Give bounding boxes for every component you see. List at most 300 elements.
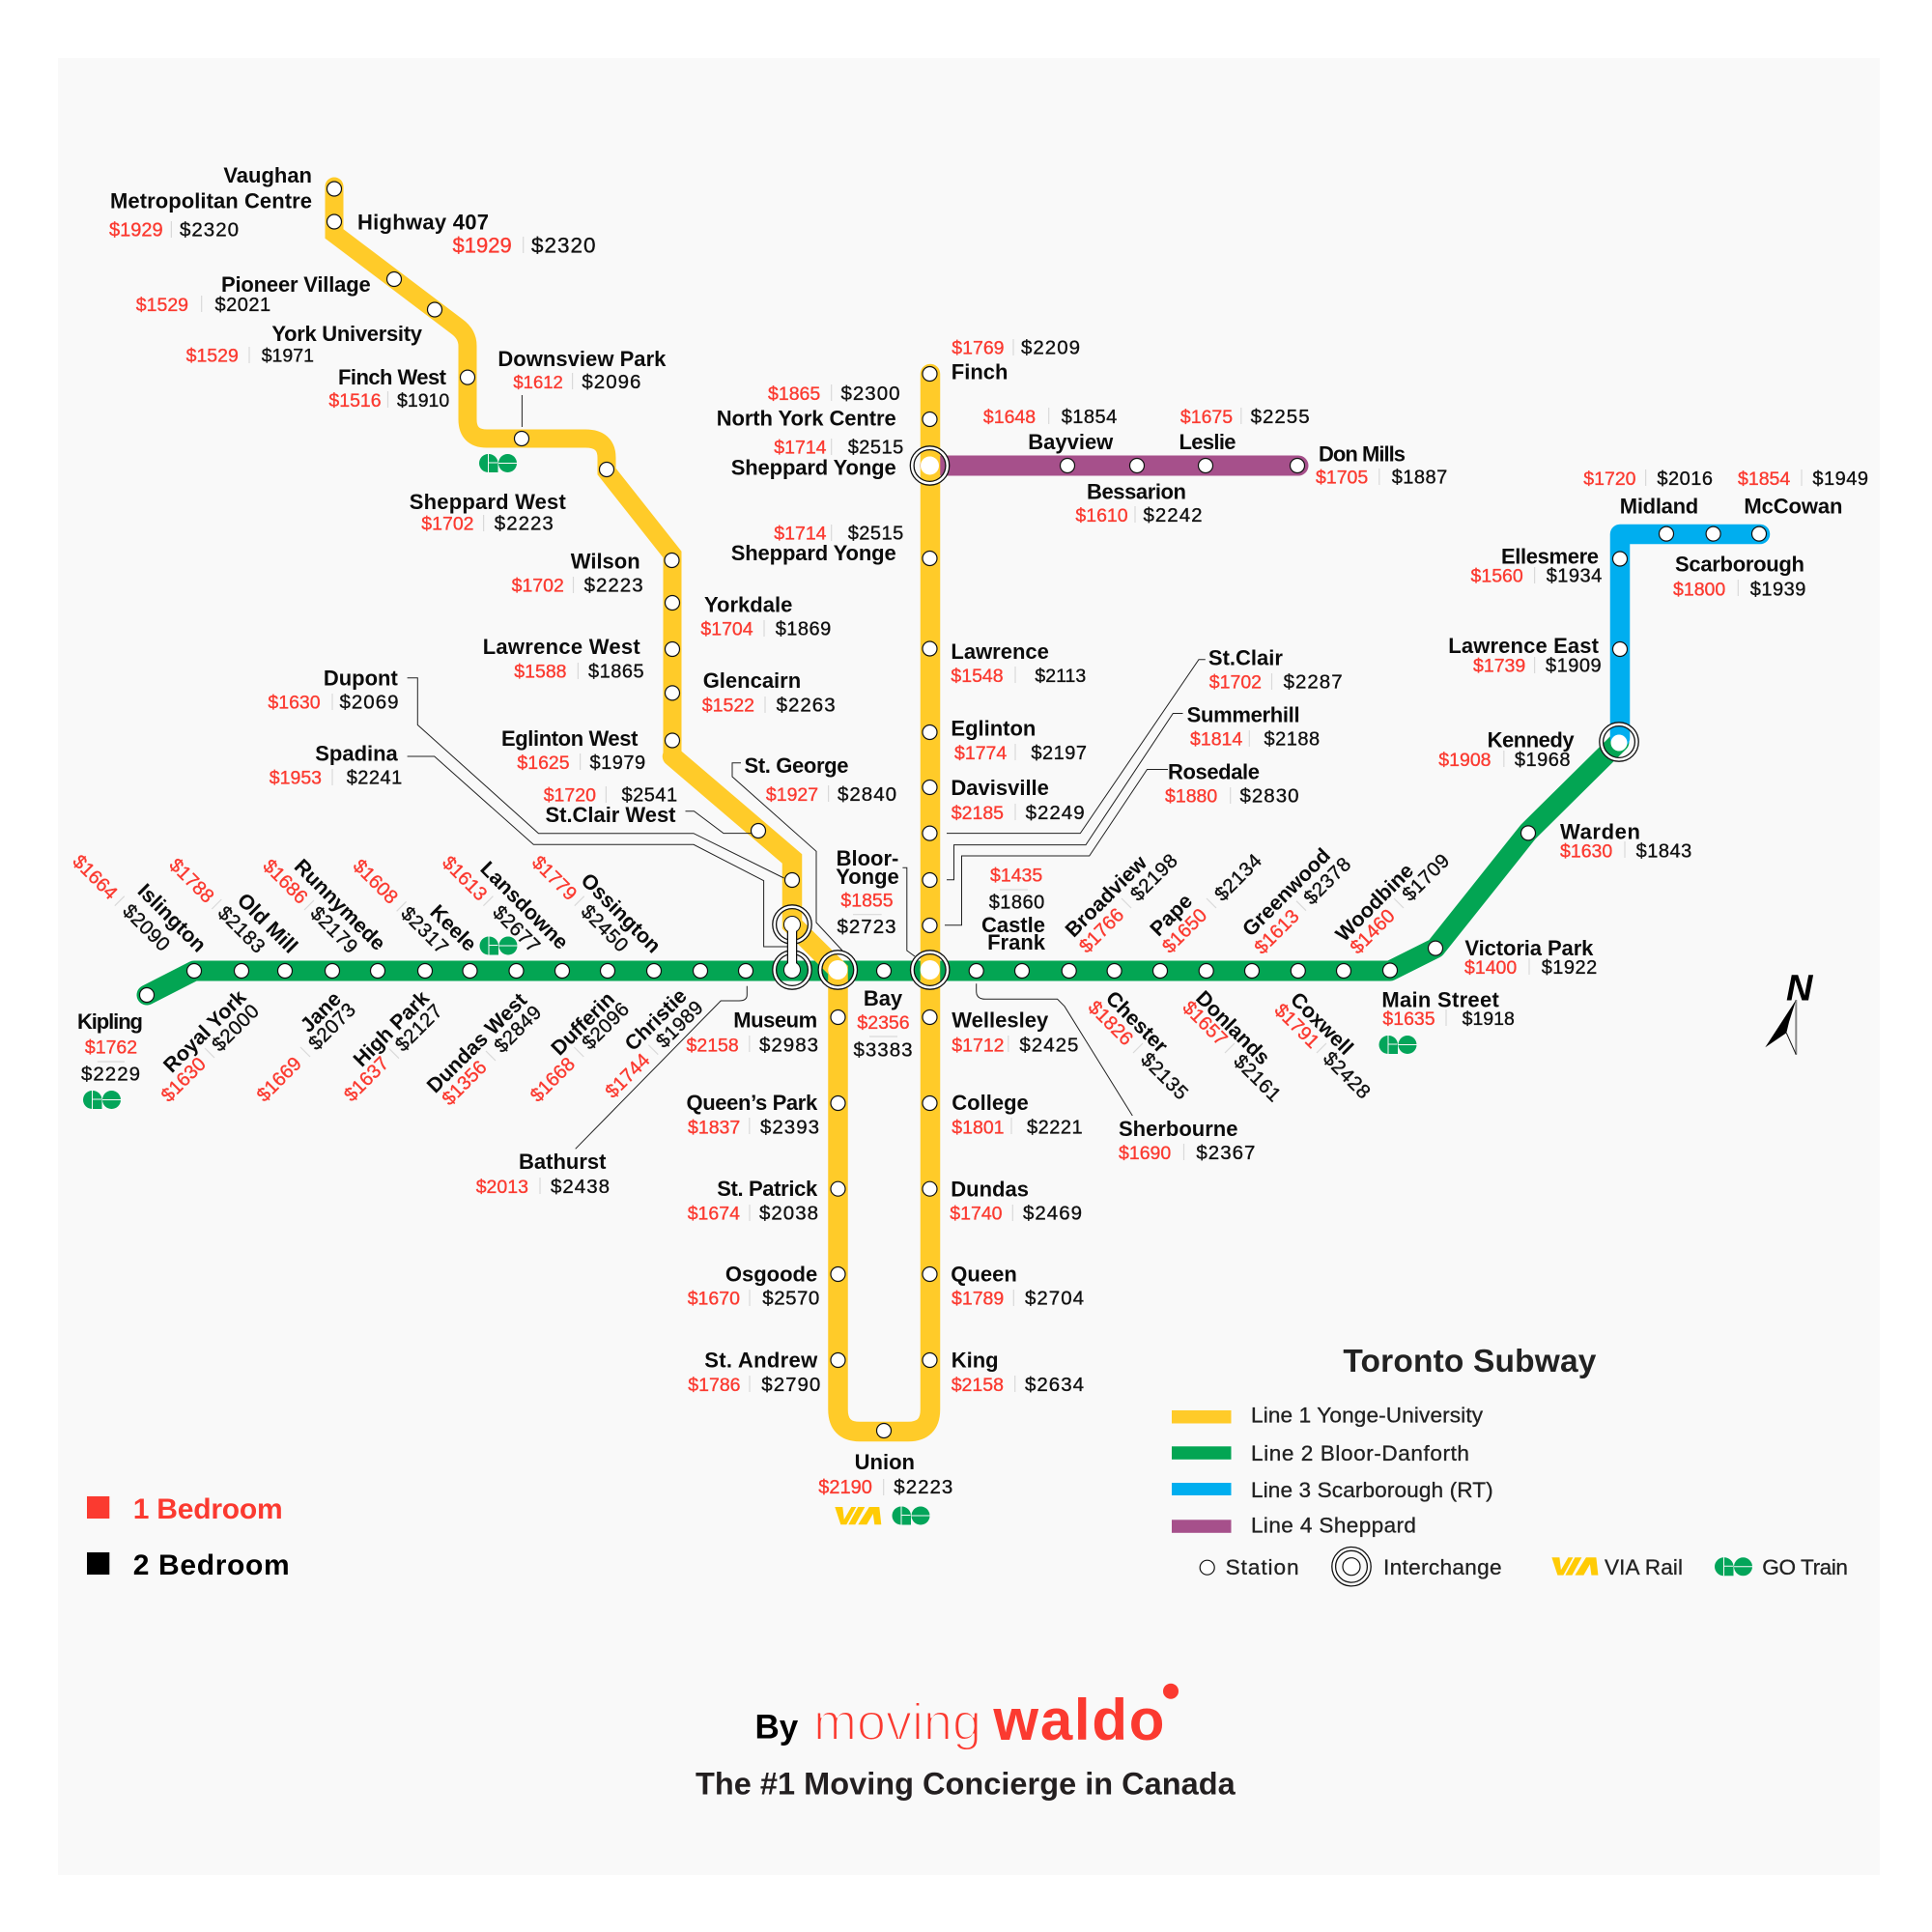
station label: Dundas West: $2849	[490, 1001, 547, 1058]
station label: Lawrence East: $1909	[1546, 655, 1602, 676]
station label: College	[952, 1091, 1083, 1138]
station label: Don Mills	[1316, 441, 1448, 488]
station label: Bay	[853, 986, 914, 1061]
station label: Downsview Park	[497, 347, 667, 393]
station label: High Park	[340, 986, 447, 1106]
stations: line 4	[1061, 458, 1304, 473]
station label: Vaughan Metropolitan Centre: Metropolitan Centre	[110, 189, 312, 213]
station label: Chester: $1826	[1084, 997, 1137, 1050]
icon: north arrow: N	[1786, 968, 1814, 1009]
station label: Osgoode	[688, 1263, 820, 1310]
station label: Midland: $2016	[1657, 469, 1714, 490]
icon: VIA Rail at Union	[835, 1507, 881, 1524]
station label: Sheppard Yonge (repeat): $1714	[774, 524, 827, 545]
bedroom key: 2 Bedroom: 2 Bedroom	[133, 1549, 290, 1581]
station label: Lawrence	[951, 639, 1086, 687]
station label: Sheppard West: Sheppard West	[410, 490, 566, 514]
station label: Don Mills: $1887	[1392, 467, 1448, 488]
station label: Dupont: $2069	[340, 692, 400, 713]
station label: Woodbine: $1460	[1347, 905, 1400, 958]
station label: Lawrence East: $1739	[1473, 655, 1525, 676]
station label: Ossington: $2450	[577, 900, 633, 957]
station label: Chester: Chester	[1101, 986, 1173, 1058]
station label: Davisville: $2249	[1026, 802, 1086, 824]
station label: Wellesley: $1712	[952, 1035, 1005, 1056]
station label: Christie: Christie	[620, 984, 692, 1055]
station label: Chester: $2135	[1136, 1048, 1193, 1105]
station label: Kipling	[77, 1009, 143, 1086]
station label: Finch West	[328, 365, 449, 412]
station label: Warden	[1560, 820, 1692, 862]
station label: Queen	[951, 1263, 1085, 1310]
station label: Bessarion	[1075, 480, 1204, 526]
icon: north arrow	[1765, 968, 1814, 1055]
station label: Keele: $2317	[396, 902, 453, 959]
station label: Old Mill: $1788	[165, 855, 218, 907]
station label: Greenwood: $2378	[1299, 853, 1356, 909]
station label: Main Street: $1918	[1463, 1009, 1515, 1030]
icon: GO train at Downsview Park	[479, 454, 517, 472]
station label: Lawrence: $1548	[951, 666, 1004, 687]
station label: Ellesmere: $1934	[1547, 566, 1603, 587]
station label: Warden: $1843	[1636, 840, 1692, 862]
station label: Union: $2223	[894, 1476, 953, 1498]
station label: Donlands: $2161	[1229, 1050, 1286, 1107]
station label: Main Street: $1635	[1382, 1009, 1435, 1030]
station label: Castle Frank: $1435	[990, 866, 1042, 887]
station label: St.Clair	[1208, 645, 1344, 694]
station label: Woodbine	[1331, 849, 1455, 958]
station label: Osgoode: $1670	[688, 1289, 740, 1310]
station label: St. Patrick: $2038	[759, 1203, 819, 1225]
station label: Warden: $1630	[1560, 840, 1612, 862]
legend: Line 4: Line 4 Sheppard	[1251, 1513, 1416, 1538]
station label: Queen's Park: Queen’s Park	[686, 1091, 818, 1115]
station label: Kipling: $1762	[85, 1037, 137, 1059]
station label: Jane	[253, 987, 360, 1106]
legend: GO Train: GO Train	[1762, 1555, 1848, 1579]
station label: Finch: Finch	[952, 359, 1008, 384]
station label: Rosedale: $1880	[1165, 785, 1217, 807]
legend: Line 2: Line 2 Bloor-Danforth	[1251, 1441, 1469, 1465]
station label: Eglinton West: Eglinton West	[501, 726, 639, 751]
station label: Dundas: $1740	[950, 1204, 1003, 1225]
station label: Lansdowne: Lansdowne	[475, 857, 573, 954]
station label: McCowan: $1854	[1738, 469, 1790, 490]
station label: Islington	[69, 851, 211, 956]
station label: Broadview: $2198	[1126, 849, 1182, 906]
station label: Ossington	[527, 852, 666, 957]
station label: St.Clair West: St.Clair West	[545, 803, 676, 827]
legend: Line 3: Line 3 Scarborough (RT)	[1251, 1478, 1493, 1502]
station label: Davisville	[951, 776, 1086, 824]
station label: Bessarion: $2242	[1144, 504, 1204, 526]
station label: Don Mills: $1705	[1316, 467, 1368, 488]
station label: Chester	[1084, 986, 1193, 1105]
station label: Leslie: Leslie	[1179, 430, 1236, 454]
station label: York University	[186, 322, 423, 367]
station label: Eglinton West: $1625	[517, 753, 570, 774]
station label: Sheppard Yonge (repeat): Sheppard Yonge	[731, 541, 896, 565]
station label: Scarborough	[1673, 552, 1806, 600]
stations: line 3	[1613, 526, 1766, 657]
station label: Dufferin: $1668	[526, 1054, 580, 1106]
station label: Old Mill: Old Mill	[233, 889, 302, 958]
station label: Bathurst: $2438	[551, 1176, 611, 1198]
station label: Sheppard West: $1702	[421, 514, 474, 535]
station label: Castle Frank: $1860	[989, 893, 1045, 914]
station label: Lawrence West	[483, 635, 644, 682]
station label: St. Andrew: St. Andrew	[704, 1348, 818, 1372]
station label: Vaughan Metropolitan Centre: $1929	[109, 220, 163, 242]
station label: Downsview Park: $2096	[582, 371, 641, 393]
station label: Coxwell: $2428	[1319, 1047, 1375, 1104]
station label: Donlands: $1657	[1179, 997, 1232, 1050]
station label: Midland: $1720	[1583, 469, 1636, 490]
station label: Spadina	[270, 742, 403, 789]
tagline: The #1 Moving Concierge in Canada	[696, 1766, 1236, 1801]
station label: Bessarion: Bessarion	[1087, 480, 1186, 504]
station label: Highway 407: Highway 407	[357, 211, 489, 234]
station label: Museum: Museum	[733, 1008, 817, 1032]
station label: St. Andrew: $1786	[688, 1375, 741, 1396]
station label: Lawrence: Lawrence	[951, 639, 1049, 664]
station label: Pape: $1650	[1158, 905, 1211, 957]
station label: Downsview Park: Downsview Park	[497, 347, 667, 371]
station label: Kennedy: Kennedy	[1488, 728, 1575, 753]
station label: Islington: $2090	[118, 899, 175, 956]
station label: St.Clair West: $2541	[622, 784, 678, 806]
station label: Victoria Park	[1464, 936, 1598, 979]
legend: Interchange: Interchange	[1383, 1555, 1502, 1579]
station label: Jane: $2073	[304, 998, 360, 1055]
station label: Main Street: Main Street	[1381, 987, 1499, 1011]
station label: Highway 407	[357, 211, 597, 258]
station label: Finch: $1769	[952, 338, 1005, 359]
station label: Yorkdale	[700, 593, 832, 640]
logo: By moving waldo: By	[755, 1708, 799, 1746]
station label: Victoria Park: Victoria Park	[1464, 936, 1594, 960]
station label: Donlands	[1179, 986, 1286, 1107]
interchange: Bloor-Yonge	[910, 951, 950, 989]
station label: Ellesmere: $1560	[1470, 566, 1523, 587]
station label: Highway 407: $2320	[531, 234, 597, 258]
station label: Pioneer Village: Pioneer Village	[221, 272, 371, 297]
station label: Glencairn: $1522	[702, 696, 754, 717]
station label: York University: $1529	[186, 346, 239, 367]
station label: Spadina: $1953	[270, 768, 322, 789]
station label: Castle Frank: Castle	[981, 913, 1045, 937]
line 1 Yonge-University south and east section	[672, 374, 930, 1432]
legend: GO Train	[1715, 1555, 1848, 1579]
station label: Lawrence West: $1865	[588, 661, 644, 682]
station label: Scarborough: Scarborough	[1675, 552, 1804, 576]
station label: Eglinton West	[501, 726, 646, 774]
line 1 Yonge-University north-west section	[334, 186, 672, 756]
station label: Lansdowne	[438, 852, 573, 957]
station label: Kennedy: $1968	[1515, 750, 1571, 771]
station label: Bay: $2356	[857, 1012, 910, 1034]
station label: Wellesley: $2425	[1019, 1034, 1079, 1056]
station label: Dundas West: Dundas West	[422, 988, 531, 1097]
station label: Finch West: $1516	[328, 390, 382, 412]
icon: GO train at Keele	[479, 936, 518, 954]
station label: St. George: $1927	[766, 784, 818, 806]
station label: Pioneer Village: $2021	[214, 295, 271, 316]
station label: Vaughan Metropolitan Centre: Vaughan	[223, 163, 312, 187]
station label: North York Centre: North York Centre	[717, 406, 896, 430]
station label: Jane: $1669	[253, 1053, 306, 1106]
icon: GO train at Main Street	[1379, 1036, 1416, 1054]
icon: GO train at Union	[893, 1506, 929, 1524]
station label: Bayview: Bayview	[1028, 430, 1114, 454]
station label: York University: York University	[271, 322, 423, 346]
station label: Castle Frank: Frank	[987, 930, 1046, 954]
station label: Eglinton West: $1979	[589, 753, 646, 774]
station label: North York Centre: $1865	[768, 384, 820, 405]
station label: Queen's Park: $1837	[688, 1117, 740, 1138]
station label: Osgoode: $2570	[762, 1288, 820, 1310]
station label: Lawrence West: $1588	[514, 661, 567, 682]
interchange: Kennedy	[1600, 723, 1638, 761]
station label: Bathurst	[476, 1150, 611, 1198]
station label: Queen: $2704	[1025, 1288, 1085, 1310]
station label: Coxwell	[1270, 987, 1375, 1104]
station label: St. Patrick: St. Patrick	[717, 1177, 818, 1201]
station label: Yorkdale: $1869	[776, 619, 832, 640]
station label: King: King	[952, 1348, 999, 1372]
station label: Museum	[686, 1008, 819, 1056]
station label: Runnymede: $1686	[259, 856, 311, 908]
station label: Sheppard Yonge: $1714	[774, 438, 827, 459]
station label: Bloor-Yonge: Bloor-	[837, 846, 898, 870]
station label: Dupont: $1630	[268, 692, 321, 713]
station label: Dupont: Dupont	[324, 666, 398, 690]
station label: Ellesmere	[1470, 544, 1603, 587]
station label: Victoria Park: $1400	[1464, 957, 1517, 979]
station label: Old Mill: $2183	[213, 901, 270, 958]
station label: Scarborough: $1800	[1673, 579, 1725, 600]
station label: Rosedale: $2830	[1240, 784, 1300, 807]
legend: Interchange	[1332, 1548, 1502, 1586]
station label: College: $1801	[952, 1117, 1005, 1138]
station label: Dufferin: $2096	[578, 998, 634, 1054]
legend: title: Toronto Subway	[1343, 1344, 1597, 1379]
station label: North York Centre	[717, 383, 901, 430]
station label: Coxwell: Coxwell	[1286, 987, 1358, 1060]
station label: Bloor-Yonge: Yonge	[836, 865, 899, 889]
station label: St. Andrew	[688, 1348, 821, 1396]
station label: Sheppard Yonge (repeat)	[731, 524, 904, 565]
line 4 Sheppard	[930, 456, 1298, 475]
station label: Bayview: $1648	[983, 407, 1036, 428]
line 3 Scarborough	[1620, 534, 1760, 738]
station label: Bay: $3383	[853, 1038, 914, 1061]
station label: St. George: St. George	[744, 753, 848, 778]
station label: Summerhill: $1814	[1190, 728, 1242, 750]
station label: Islington: $1664	[69, 851, 122, 904]
station label: King: $2158	[952, 1375, 1004, 1396]
station label: St.Clair: St.Clair	[1208, 645, 1283, 670]
station label: Coxwell: $1791	[1270, 1000, 1323, 1053]
station label: Greenwood: Greenwood	[1237, 843, 1335, 941]
station label: King	[952, 1348, 1085, 1396]
station label: Christie	[602, 984, 708, 1102]
leader lines	[408, 395, 1206, 1149]
station label: Christie: $1744	[602, 1050, 654, 1102]
station label: St.Clair: $2287	[1284, 671, 1344, 694]
station label: Ellesmere: Ellesmere	[1501, 544, 1599, 568]
stations: line 2	[139, 826, 1536, 1003]
station label: Summerhill: Summerhill	[1187, 702, 1300, 726]
station label: Dundas	[950, 1177, 1083, 1225]
logo: By moving waldo: moving	[813, 1693, 981, 1751]
station label: Main Street	[1381, 987, 1515, 1030]
station label: Queen's Park	[686, 1091, 820, 1138]
station label: St.Clair: $1702	[1209, 672, 1262, 694]
station label: Museum: $2983	[759, 1034, 819, 1056]
station label: Keele: Keele	[425, 900, 481, 955]
station label: Wellesley	[952, 1008, 1079, 1056]
station label: Pioneer Village: $1529	[136, 295, 188, 316]
station label: Sheppard Yonge	[731, 438, 904, 480]
station label: Dufferin: Dufferin	[547, 987, 619, 1060]
station label: Bloor-Yonge: $1855	[840, 891, 894, 912]
station label: Pioneer Village	[136, 272, 371, 316]
station label: Wilson: $1702	[512, 576, 564, 597]
interchange: Sheppard Yonge	[910, 446, 950, 485]
station label: Midland: Midland	[1620, 495, 1698, 519]
station label: Vaughan Metropolitan Centre: $2320	[180, 219, 240, 242]
station label: Summerhill	[1187, 702, 1321, 750]
station label: Bay: Bay	[864, 986, 903, 1010]
station label: Wilson: Wilson	[571, 549, 640, 573]
station label: Summerhill: $2188	[1264, 728, 1321, 750]
bedroom key: 1 Bedroom: 1 Bedroom	[133, 1493, 283, 1525]
station label: Victoria Park: $1922	[1542, 957, 1598, 979]
station label: Dupont	[268, 666, 400, 713]
station label: Highway 407: $1929	[452, 234, 512, 258]
station label: Rosedale: Rosedale	[1168, 759, 1260, 783]
legend: Line 4	[1172, 1513, 1416, 1538]
station label: Keele: $1608	[349, 856, 402, 908]
station label: Kennedy	[1438, 728, 1575, 771]
legend: VIA Rail: VIA Rail	[1605, 1555, 1683, 1579]
station label: Kipling: Kipling	[77, 1009, 143, 1034]
station label: Dundas West: $1356	[439, 1057, 492, 1110]
station label: Bayview: $1854	[1062, 407, 1118, 428]
station label: Broadview: $1766	[1075, 904, 1128, 957]
station label: Lawrence East: Lawrence East	[1448, 634, 1600, 658]
station label: Yorkdale: Yorkdale	[704, 593, 792, 617]
station label: Sherbourne: $2367	[1196, 1142, 1256, 1164]
station label: Broadview	[1061, 849, 1182, 957]
station label: High Park: $2127	[391, 1000, 447, 1056]
station label: Royal York: $2000	[208, 1000, 264, 1056]
station label: College: College	[952, 1091, 1029, 1115]
station label: St. Patrick: $1674	[688, 1204, 740, 1225]
station label: Royal York	[157, 985, 264, 1106]
station label: Warden: Warden	[1560, 820, 1640, 844]
station label: Bessarion: $1610	[1075, 505, 1128, 526]
station label: Dufferin	[526, 987, 634, 1106]
station label: High Park: High Park	[349, 986, 434, 1071]
station label: Keele	[349, 856, 481, 959]
station label: Eglinton: $2197	[1031, 743, 1088, 764]
station label: Union	[818, 1450, 953, 1498]
station label: Kennedy: $1908	[1438, 750, 1492, 771]
station label: Royal York: Royal York	[159, 985, 251, 1077]
station label: Lansdowne: $1613	[438, 852, 491, 905]
station label: Finch	[952, 337, 1081, 384]
station label: St.Clair West: $1720	[544, 784, 596, 806]
logo: By moving waldo: waldo	[992, 1688, 1164, 1752]
station label: Woodbine: Woodbine	[1331, 859, 1418, 946]
station label: Queen: Queen	[951, 1263, 1017, 1287]
station label: Sherbourne	[1119, 1117, 1256, 1164]
station label: Leslie	[1179, 406, 1311, 454]
station label: Sheppard Yonge: Sheppard Yonge	[731, 456, 896, 480]
station label: Finch West: Finch West	[338, 365, 447, 389]
station label: McCowan: $1949	[1812, 469, 1869, 490]
station label: Bathurst: $2013	[476, 1177, 528, 1198]
station label: Spadina: Spadina	[315, 742, 399, 765]
station label: Dundas: Dundas	[951, 1177, 1029, 1201]
station label: Davisville: Davisville	[951, 776, 1049, 800]
station label: Kipling: $2229	[81, 1064, 141, 1086]
station label: Finch West: $1910	[397, 390, 449, 412]
station label: Wilson	[512, 549, 644, 597]
station label: King: $2634	[1025, 1374, 1085, 1396]
station label: Ossington: Ossington	[577, 868, 666, 957]
station label: Lawrence East	[1448, 634, 1602, 676]
station label: Glencairn	[702, 668, 837, 717]
station label: Dundas: $2469	[1023, 1203, 1083, 1225]
station label: Scarborough: $1939	[1750, 579, 1806, 600]
station label: Osgoode: Osgoode	[725, 1263, 817, 1287]
station label: Sheppard Yonge: $2515	[848, 438, 904, 459]
station label: Union: $2190	[818, 1477, 872, 1498]
interchange: Bay junction	[818, 951, 858, 989]
station label: Runnymede: Runnymede	[290, 855, 390, 955]
station label: Don Mills: Don Mills	[1319, 441, 1406, 466]
station label: Leslie: $2255	[1251, 406, 1311, 428]
station label: St. Andrew: $2790	[761, 1374, 821, 1396]
station label: Jane: Jane	[296, 987, 346, 1037]
station label: Leslie: $1675	[1180, 407, 1233, 428]
legend: Station: Station	[1226, 1555, 1299, 1579]
station label: Finch: $2209	[1021, 337, 1081, 359]
station label: Castle Frank	[981, 866, 1046, 954]
station label: McCowan: McCowan	[1744, 495, 1842, 519]
interchange: Spadina to St George link	[773, 905, 811, 989]
station label: Davisville: $2185	[952, 803, 1004, 824]
station label: Glencairn: $2263	[777, 695, 837, 717]
legend: VIA Rail	[1551, 1555, 1683, 1579]
station label: College: $2221	[1027, 1117, 1083, 1138]
station label: Sheppard West	[410, 490, 566, 535]
station label: St. George: $2840	[838, 783, 897, 806]
station label: Ossington: $1779	[527, 852, 581, 905]
station label: Bloor-Yonge: $2723	[837, 916, 897, 938]
station label: Donlands: Donlands	[1191, 986, 1274, 1069]
station label: Pape: $2134	[1210, 849, 1266, 906]
station label: Union: Union	[855, 1450, 915, 1474]
station label: Greenwood: $1613	[1251, 906, 1304, 958]
station label: Glencairn: Glencairn	[703, 668, 801, 693]
station label: Vaughan Metropolitan Centre	[109, 163, 312, 242]
station label: Greenwood	[1237, 843, 1356, 958]
